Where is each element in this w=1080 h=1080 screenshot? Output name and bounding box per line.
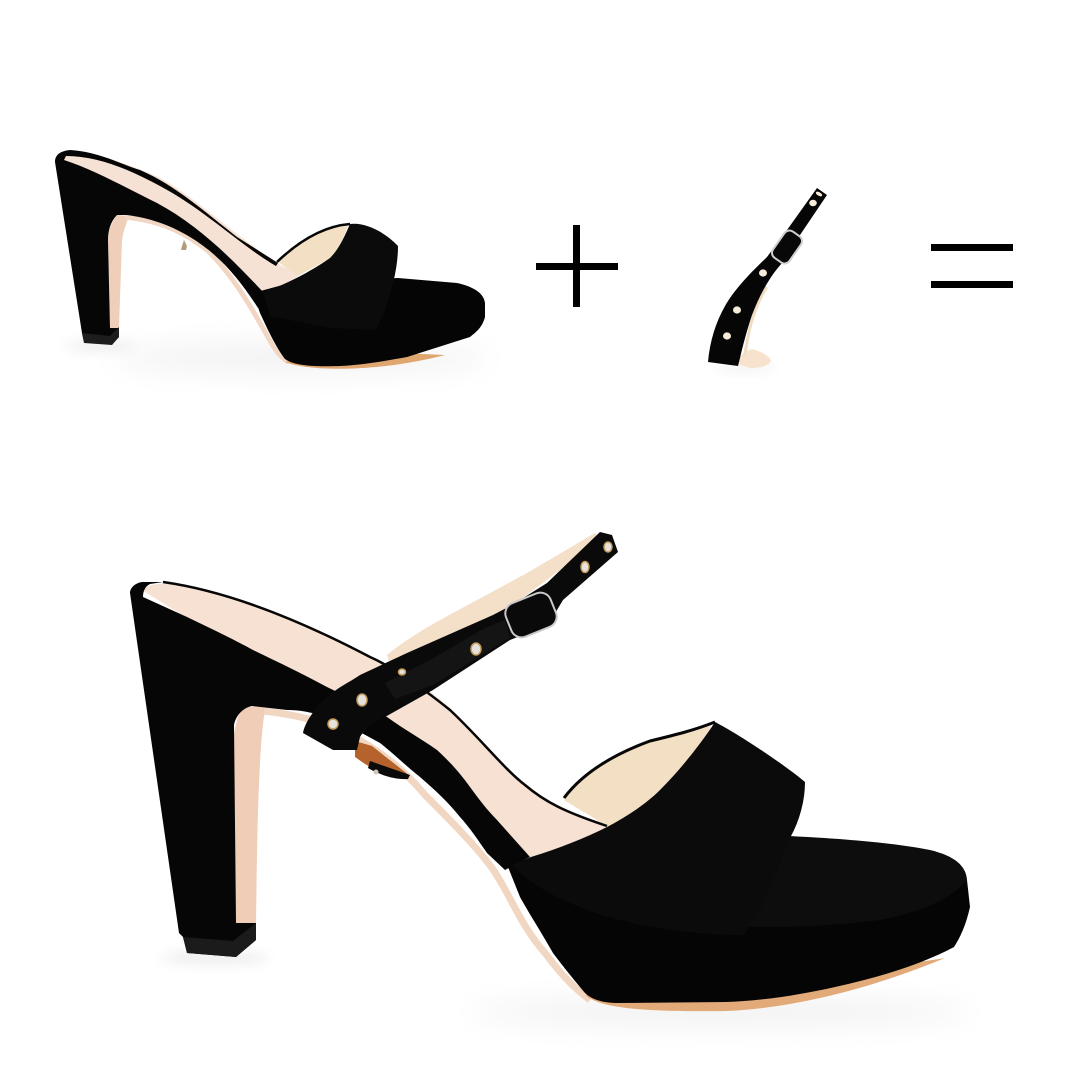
large toe bed (740, 836, 967, 942)
ankle strap accessory (708, 188, 827, 371)
strap buckle (770, 228, 804, 266)
small shoe vamp top line (277, 224, 350, 262)
large vamp (512, 722, 805, 935)
strap body (708, 188, 827, 366)
large orange welt (585, 958, 945, 1011)
ankle strap on large shoe (303, 532, 618, 750)
strap footbed (738, 349, 771, 368)
small shoe heel tip (82, 327, 119, 345)
large insole top edge line (163, 582, 607, 826)
small shoe vamp (263, 224, 398, 330)
small shoe charm (181, 240, 187, 250)
equals sign (931, 244, 1013, 288)
strap buckle (502, 589, 560, 641)
strap peach edge (743, 285, 768, 357)
small shoe insole (62, 153, 300, 296)
front inner lining (564, 726, 711, 826)
small shoe heel breast (108, 215, 130, 328)
small shoe counter and heel (55, 150, 278, 344)
vamp top line (564, 722, 715, 798)
large heel tip (183, 923, 256, 957)
heel peach breast (232, 706, 268, 930)
strap tail (385, 620, 510, 699)
small shoe orange welt (285, 353, 445, 369)
strap studs (723, 191, 823, 340)
large insole (142, 584, 620, 860)
small mule shoe (55, 150, 490, 372)
small shoe inner lining (278, 226, 348, 276)
plus sign (536, 225, 618, 307)
upper strap peach lining (387, 533, 600, 680)
hanging charm (355, 741, 410, 779)
large sole peach edge (264, 711, 590, 1000)
small shoe sole edge (125, 217, 289, 362)
large platform (504, 857, 970, 1003)
large counter and heel (130, 582, 530, 957)
strap studs (328, 542, 612, 729)
small shoe toe bed and platform (253, 278, 485, 366)
large sandal with strap (130, 532, 970, 1024)
